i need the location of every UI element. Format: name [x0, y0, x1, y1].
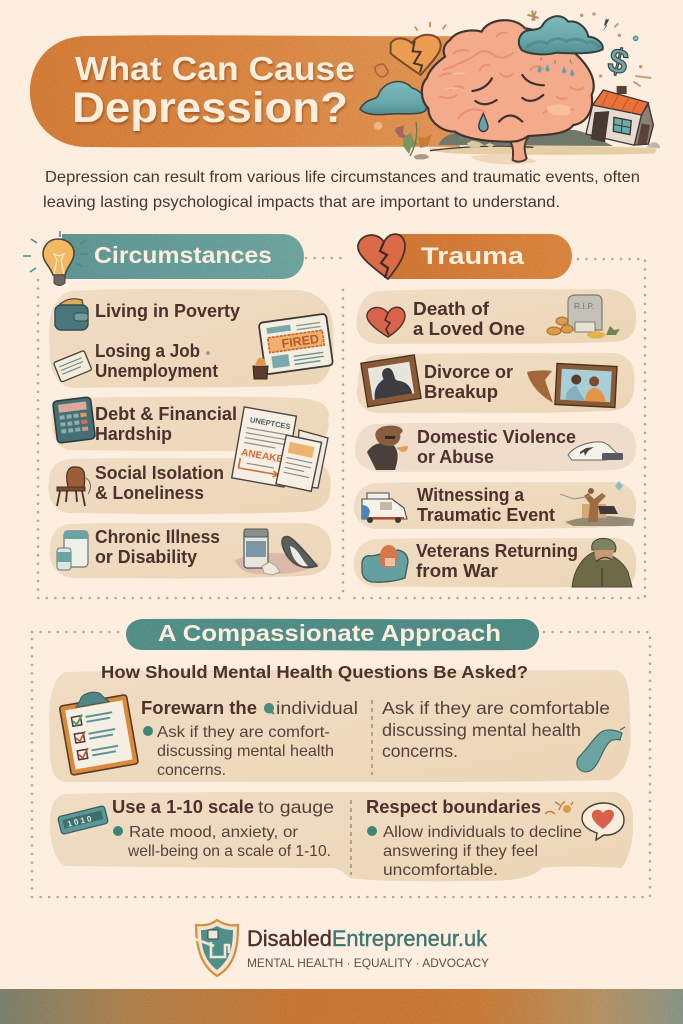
text: scale bullet [113, 824, 331, 860]
icon: dollar sign: $ [604, 41, 632, 83]
text: losing a job [95, 341, 218, 381]
icon: helmet figure on tablet [362, 545, 408, 582]
icon: scale device [58, 805, 108, 835]
panel: scale and boundaries card [50, 792, 633, 881]
icon: couple photo frame [527, 363, 617, 408]
icon: small cloud [360, 82, 426, 115]
icon: clipboard [58, 686, 138, 775]
text: social isolation: Social Isolation [95, 463, 224, 483]
title: Depression? [72, 85, 348, 132]
icon: heading broken heart [358, 234, 405, 279]
decorative dotted frames [38, 280, 342, 598]
scene drawn in zoom coordinates [413, 11, 660, 164]
intro text: Depression can result from various life circumstances and traumatic events, often [45, 169, 640, 186]
icon: leaves [374, 122, 432, 156]
text: veterans: Veterans Returning [416, 541, 578, 561]
heading pill: compassionate approach: A Compassionate Approach [158, 620, 501, 646]
title banner [30, 35, 460, 147]
text: forewarn heading: Forewarn the [141, 698, 257, 718]
icon: documents [232, 407, 328, 491]
text: ask if comfortable: Ask if they are comfortable [382, 698, 610, 718]
text: debt: Debt & Financial [95, 404, 237, 424]
text: divorce: Breakup [424, 382, 498, 402]
panel: poverty and job [49, 289, 334, 388]
icon: broken heart [391, 22, 446, 75]
text: scale bullet: Rate mood, anxiety, or [129, 824, 299, 841]
icon: disaster scene [560, 481, 635, 526]
text: debt [95, 404, 237, 444]
intro text [43, 169, 640, 211]
text: forewarn bullet: discussing mental health [157, 743, 334, 760]
icon: broken heart [367, 307, 405, 337]
text: forewarn heading: individual [276, 698, 358, 718]
text: logo wordmark: DisabledEntrepreneur.uk [247, 926, 488, 951]
panel: divorce [357, 353, 634, 413]
icon: gravestone [547, 295, 620, 338]
text: ask if comfortable: concerns. [382, 741, 458, 761]
icon: gravestone: R.I.P. [574, 301, 594, 311]
text: domestic violence: Domestic Violence [417, 427, 576, 447]
text: divorce: Divorce or [424, 362, 513, 382]
icon: soldier [572, 538, 632, 587]
icon: ground [413, 130, 660, 164]
bottom strip [0, 989, 683, 1024]
icon: small newspaper [53, 350, 92, 382]
icon: teal marker [264, 703, 275, 715]
icon: small bag [253, 358, 268, 379]
heading pill: trauma [388, 234, 572, 279]
icon: scale device: 1 0 1 0 [67, 814, 93, 829]
icon: light bulb [23, 231, 88, 286]
icon: frame with silhouette [361, 355, 421, 407]
text: respect heading: Respect boundaries [366, 797, 541, 817]
text: scale heading: Use a 1-10 scale [112, 797, 254, 817]
text: card subheading: How Should Mental Health Questions Be Asked? [101, 662, 528, 682]
heading pill: circumstances: Circumstances [94, 242, 272, 268]
text: debt: Hardship [95, 424, 172, 444]
text: respect bullet: uncomfortable. [383, 862, 498, 879]
text: losing a job: Unemployment [95, 361, 218, 381]
text: forewarn bullet: Ask if they are comfort- [157, 724, 330, 741]
icon: pill bottles [57, 531, 88, 570]
icon: brain [422, 20, 594, 162]
icon: small orange figure [545, 802, 573, 814]
text: ask if comfortable: discussing mental health [382, 720, 581, 740]
text: respect bullet: Allow individuals to decline [383, 824, 582, 841]
icon: ambulance [362, 493, 407, 523]
text: domestic violence: or Abuse [417, 447, 494, 467]
icon: fired newspaper: FIRED [281, 332, 320, 351]
panel: death [356, 289, 636, 344]
icon: documents: ANEAKE [240, 447, 284, 465]
text: forewarn bullet: concerns. [157, 762, 226, 779]
text: witnessing: Traumatic Event [417, 505, 555, 525]
panel: a compassionate approach [49, 619, 633, 881]
intro text: leaving lasting psychological impacts that are important to understand. [43, 194, 560, 211]
icon: house [586, 86, 653, 145]
text: chronic illness: Chronic Illness [95, 527, 220, 547]
text: respect bullet [367, 824, 582, 879]
icon: medicine and stethoscope [235, 529, 320, 575]
icon: heart speech bubble [582, 803, 624, 840]
header illustration [360, 11, 660, 164]
icon: shield [195, 920, 238, 976]
title [72, 51, 355, 132]
panel: debt [52, 396, 329, 451]
icon: wallet [55, 299, 88, 330]
icon: documents: UNEPTCES [249, 415, 291, 431]
icon: chalk outline bag [568, 442, 623, 460]
text: chronic illness: or Disability [95, 547, 198, 567]
icon: fired newspaper [259, 314, 333, 374]
heading pill: trauma: Trauma [421, 243, 525, 270]
panel: domestic violence [355, 423, 636, 472]
heading pill: compassionate approach [126, 619, 539, 650]
text: ask if comfortable [382, 698, 610, 761]
panel: forewarn card [49, 662, 631, 782]
logo [195, 920, 489, 976]
text: death: a Loved One [413, 319, 525, 339]
icon: person [367, 426, 408, 470]
text: scale heading [112, 797, 334, 817]
text: veterans [416, 541, 578, 581]
text: living in poverty: Living in Poverty [95, 301, 241, 321]
text: death [413, 299, 525, 339]
text: respect bullet: answering if they feel [383, 843, 538, 860]
panel: trauma [354, 234, 636, 587]
icon: rain cloud [519, 16, 603, 76]
title: What Can Cause [75, 51, 355, 88]
panel: circumstances [23, 231, 334, 578]
icon: sparks [527, 11, 651, 86]
text: forewarn heading [141, 698, 358, 718]
text: death: Death of [413, 299, 490, 319]
text: witnessing [417, 485, 555, 525]
icon: chair [57, 467, 91, 506]
icon: sad face [472, 75, 544, 131]
panel: veterans [354, 538, 636, 587]
panel: chronic illness [50, 523, 331, 578]
icon: teal tool [577, 727, 625, 772]
text: divorce [424, 362, 513, 402]
text: domestic violence [417, 427, 576, 467]
text: witnessing: Witnessing a [417, 485, 525, 505]
text: chronic illness [95, 527, 220, 567]
icon: smoke puff [375, 64, 388, 77]
heading pill: circumstances [62, 234, 304, 279]
text: scale bullet: well-being on a scale of 1-10. [127, 843, 331, 860]
panel: social isolation [48, 458, 331, 514]
text: social isolation [95, 463, 224, 503]
text: tagline: MENTAL HEALTH · EQUALITY · ADVOCACY [247, 956, 489, 970]
text: losing a job: Losing a Job [95, 341, 200, 361]
panel: witnessing [354, 481, 636, 529]
text: forewarn bullet [143, 724, 334, 779]
text: scale heading: to gauge [258, 797, 334, 817]
text: social isolation: & Loneliness [95, 483, 204, 503]
icon: calculator [53, 397, 95, 443]
text: veterans: from War [416, 561, 498, 581]
